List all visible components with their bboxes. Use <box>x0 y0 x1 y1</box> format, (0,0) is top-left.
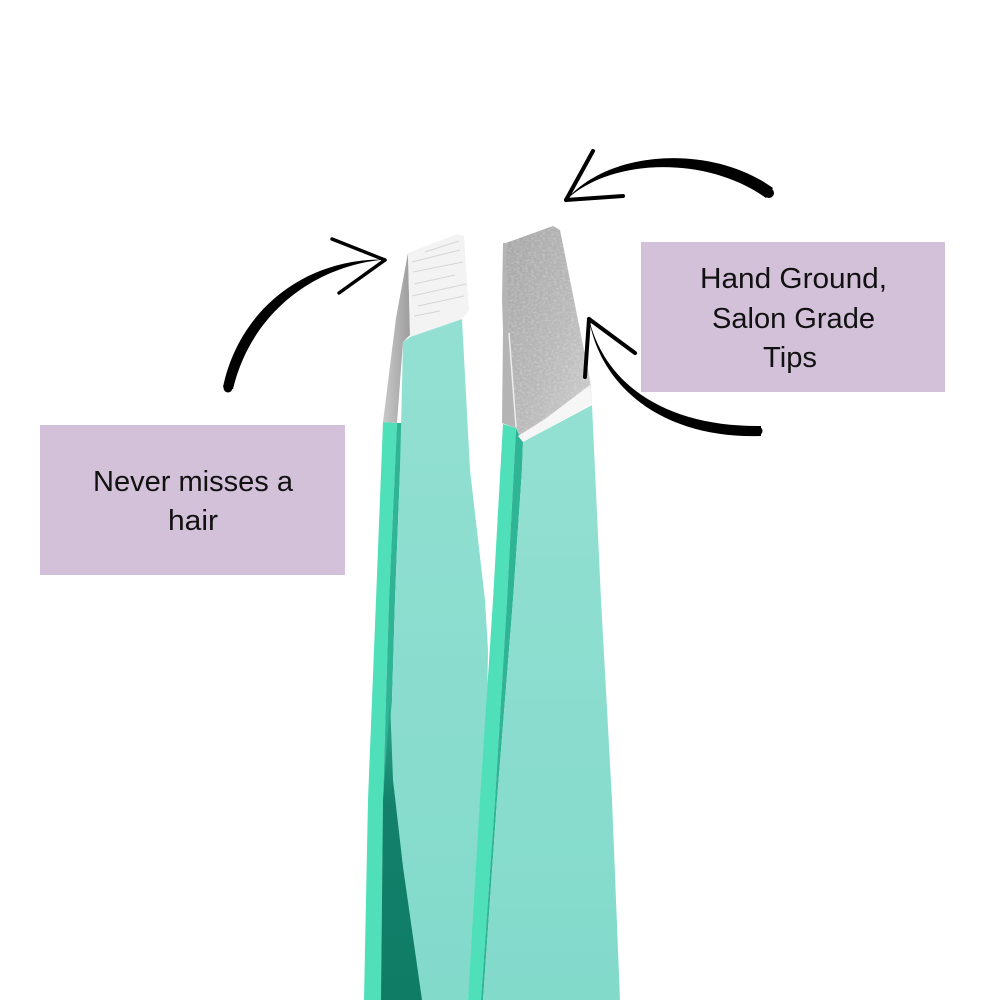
left arm: grey side bevel <box>383 253 410 423</box>
arrow: lower right, pointing to right tip <box>585 319 762 436</box>
left arm: enamel face <box>381 319 488 1000</box>
left arm: shadow on face <box>381 700 422 1000</box>
callout: hand ground, salon grade tips: Tips <box>763 342 817 374</box>
right arm: grey side bevel <box>502 243 516 428</box>
callout: hand ground, salon grade tips: Hand Ground, <box>700 263 887 295</box>
right arm: white sliver <box>509 333 516 427</box>
left arm: bright ground tip <box>408 234 469 337</box>
right arm: white bevel edge <box>518 385 592 442</box>
callout: hand ground, salon grade tips <box>641 242 945 392</box>
arrow: left, pointing to left tip <box>223 239 385 392</box>
callout: never misses a hair <box>40 425 345 575</box>
callout: hand ground, salon grade tips: Salon Grade <box>712 303 875 335</box>
right arm: green side strip <box>468 424 516 1000</box>
callout: never misses a hair: hair <box>168 505 219 537</box>
left arm: green side strip <box>364 422 397 1000</box>
tweezer: right arm <box>468 220 620 1000</box>
right arm: dark inner band <box>481 428 523 1000</box>
left arm: dark inner band <box>381 423 402 1000</box>
left arm: tip brushed lines <box>412 241 466 316</box>
callout: never misses a hair: Never misses a <box>93 466 293 498</box>
right arm: steel ground tip <box>506 226 592 442</box>
arrow: top right, pointing to right tip <box>566 151 774 200</box>
tweezer: left arm <box>364 234 488 1000</box>
right arm: enamel face <box>483 405 620 1000</box>
right arm: tip grain texture <box>506 226 588 434</box>
